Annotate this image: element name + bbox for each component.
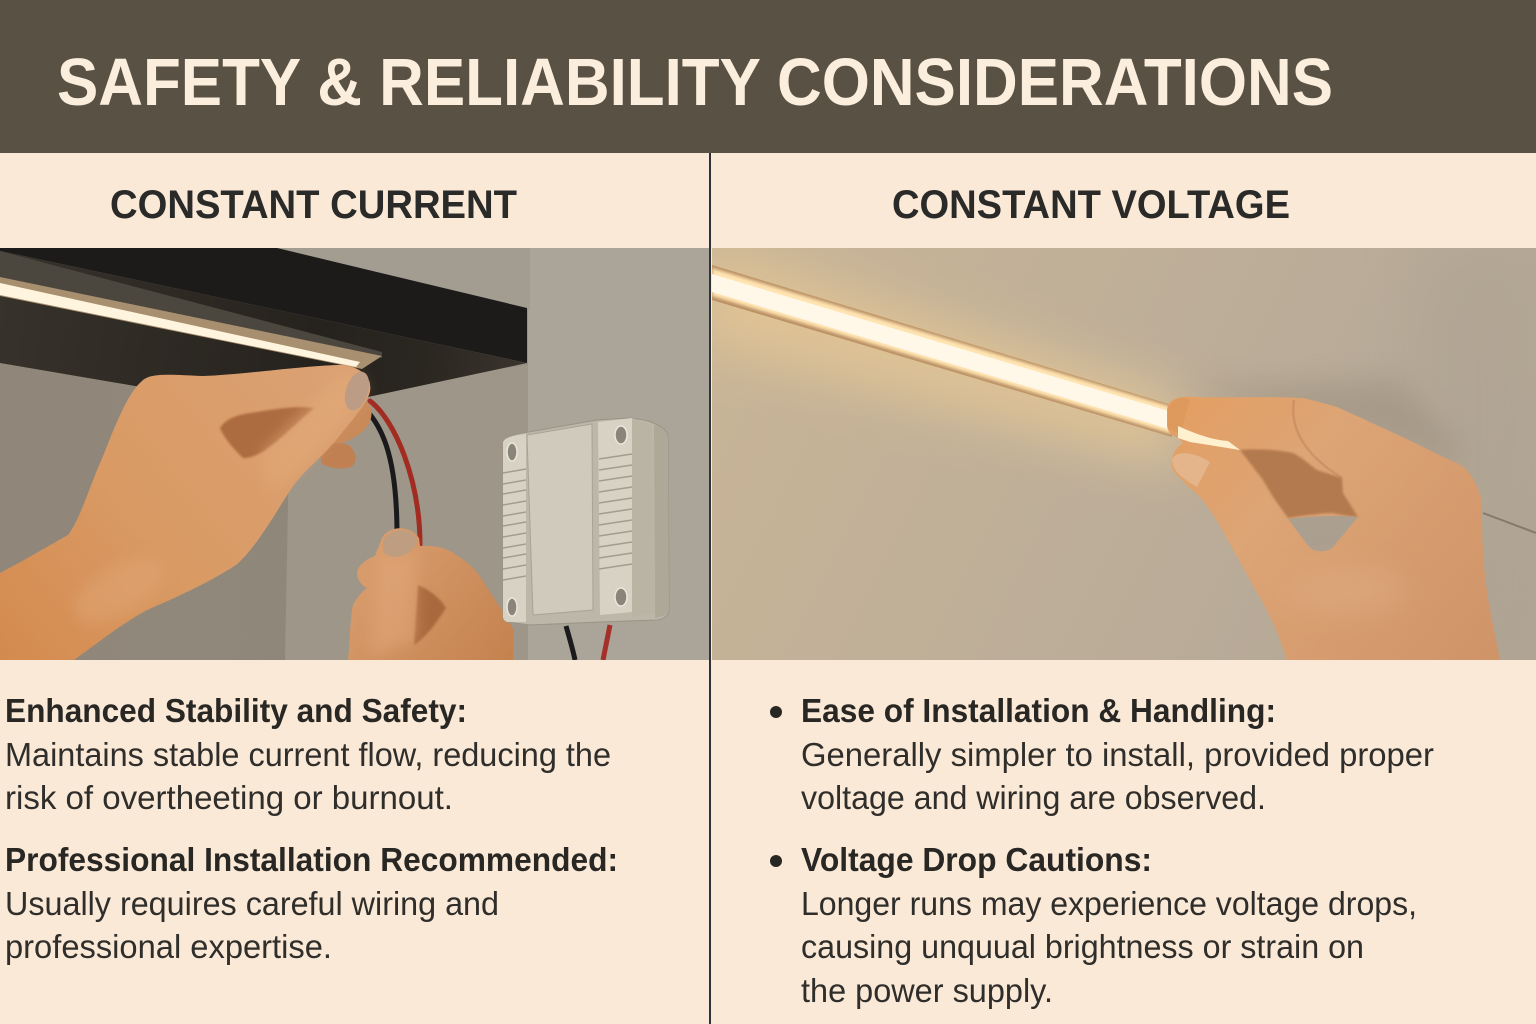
right text: voltage drop [770,841,1417,1009]
left text: professional installation: professional expertise. [5,928,332,965]
right text: voltage drop: causing unquual brightness or strain on [801,928,1364,965]
column heading: constant voltage: CONSTANT VOLTAGE [892,183,1290,227]
right hand [348,528,514,660]
shelf [0,248,527,397]
right text: voltage drop: Voltage Drop Cautions: [801,841,1152,878]
right text: ease of installation: voltage and wiring are observed. [801,779,1266,816]
right text: voltage drop: the power supply. [801,972,1053,1009]
right text: voltage drop: Longer runs may experience voltage drops, [801,885,1417,922]
driver box [503,418,669,625]
driver cables [566,625,610,660]
column divider [709,153,711,1024]
left text: stability and safety: Enhanced Stability and Safety: [5,692,467,729]
LED strip [0,277,382,369]
strip glow [700,250,1180,470]
left hand [0,365,374,660]
left text: stability and safety: risk of overtheeting or burnout. [5,779,453,816]
left text: professional installation: Professional Installation Recommended: [5,841,618,878]
photo: constant voltage strip [700,248,1536,660]
left text: professional installation [5,841,618,965]
title: SAFETY & RELIABILITY CONSIDERATIONS [57,45,1333,120]
column heading: constant current: CONSTANT CURRENT [110,183,517,227]
wires [363,401,420,545]
LED strip [712,265,1172,437]
hand [1167,397,1500,660]
right text: ease of installation [770,692,1434,816]
right text: ease of installation: Generally simpler to install, provided proper [801,736,1434,773]
left text: professional installation: Usually requires careful wiring and [5,885,499,922]
left text: stability and safety [5,692,611,816]
photo: constant current installation [0,248,709,660]
crack line [1483,513,1536,533]
header band [0,0,1536,153]
left text: stability and safety: Maintains stable current flow, reducing the [5,736,611,773]
right text: ease of installation: Ease of Installation & Handling: [801,692,1276,729]
